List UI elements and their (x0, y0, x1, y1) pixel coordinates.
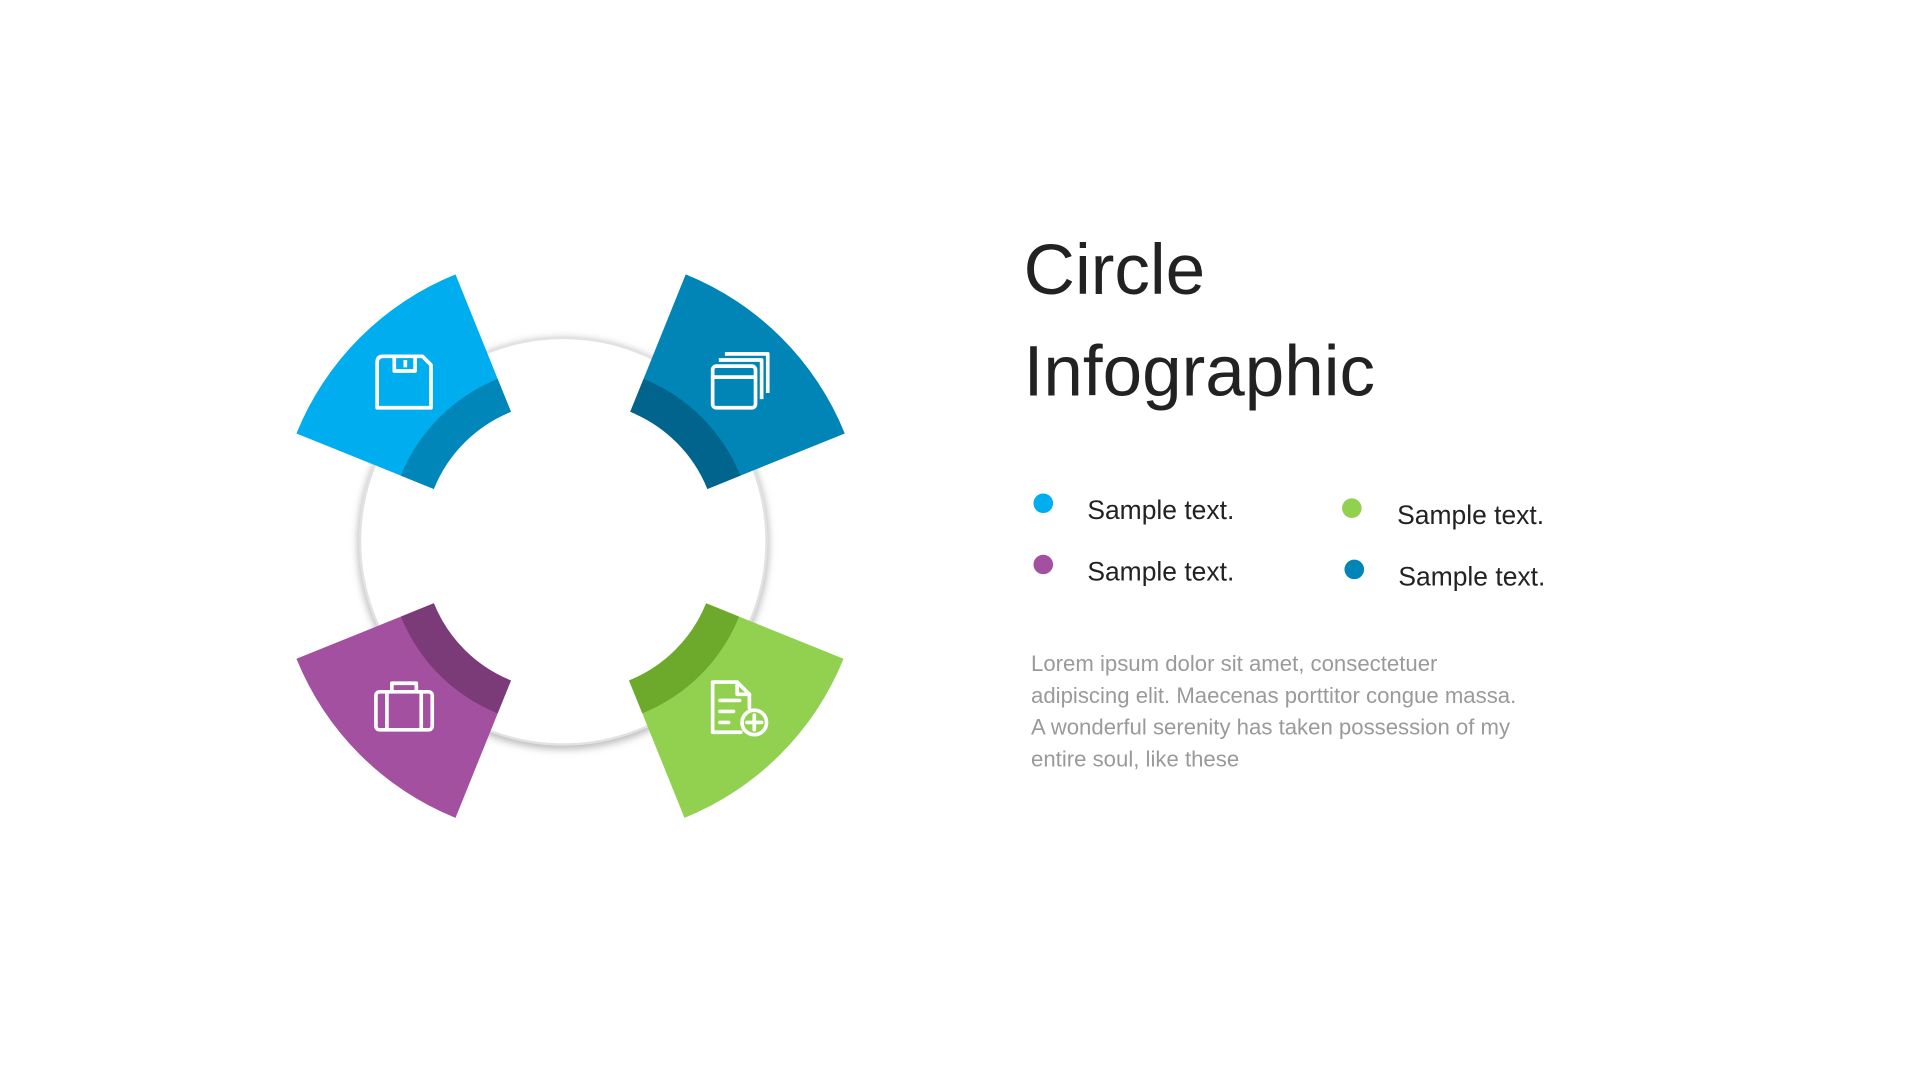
body text: Lorem ipsum dolor sit amet, consectetuer (1031, 651, 1438, 676)
legend item: dark blue (1344, 560, 1545, 591)
body text (1031, 651, 1516, 772)
segment: top-left blue (296, 274, 511, 489)
body text: A wonderful serenity has taken possession of my (1031, 715, 1511, 740)
legend item: green: Sample text. (1397, 500, 1544, 530)
segment: top-right dark blue (630, 274, 845, 489)
body text: entire soul, like these (1031, 747, 1239, 772)
body text: adipiscing elit. Maecenas porttitor congue massa. (1031, 683, 1516, 708)
title: Circle (1024, 231, 1205, 310)
legend (1033, 493, 1545, 591)
icon: stacked windows (713, 354, 768, 408)
legend item: purple (1033, 555, 1234, 586)
icon: briefcase (376, 683, 432, 730)
legend item: purple: Sample text. (1087, 556, 1234, 586)
legend item: dark blue: Sample text. (1398, 561, 1545, 591)
legend item: green (1342, 498, 1544, 530)
icon: document add (713, 682, 767, 735)
title: Infographic (1024, 333, 1375, 412)
title (1024, 231, 1375, 412)
segment: bottom-right green (629, 603, 844, 818)
segment: bottom-left purple (296, 603, 511, 818)
icon: floppy disk (377, 356, 431, 408)
legend item: light blue (1033, 493, 1234, 525)
legend item: light blue: Sample text. (1087, 495, 1234, 525)
central circle (358, 338, 769, 749)
